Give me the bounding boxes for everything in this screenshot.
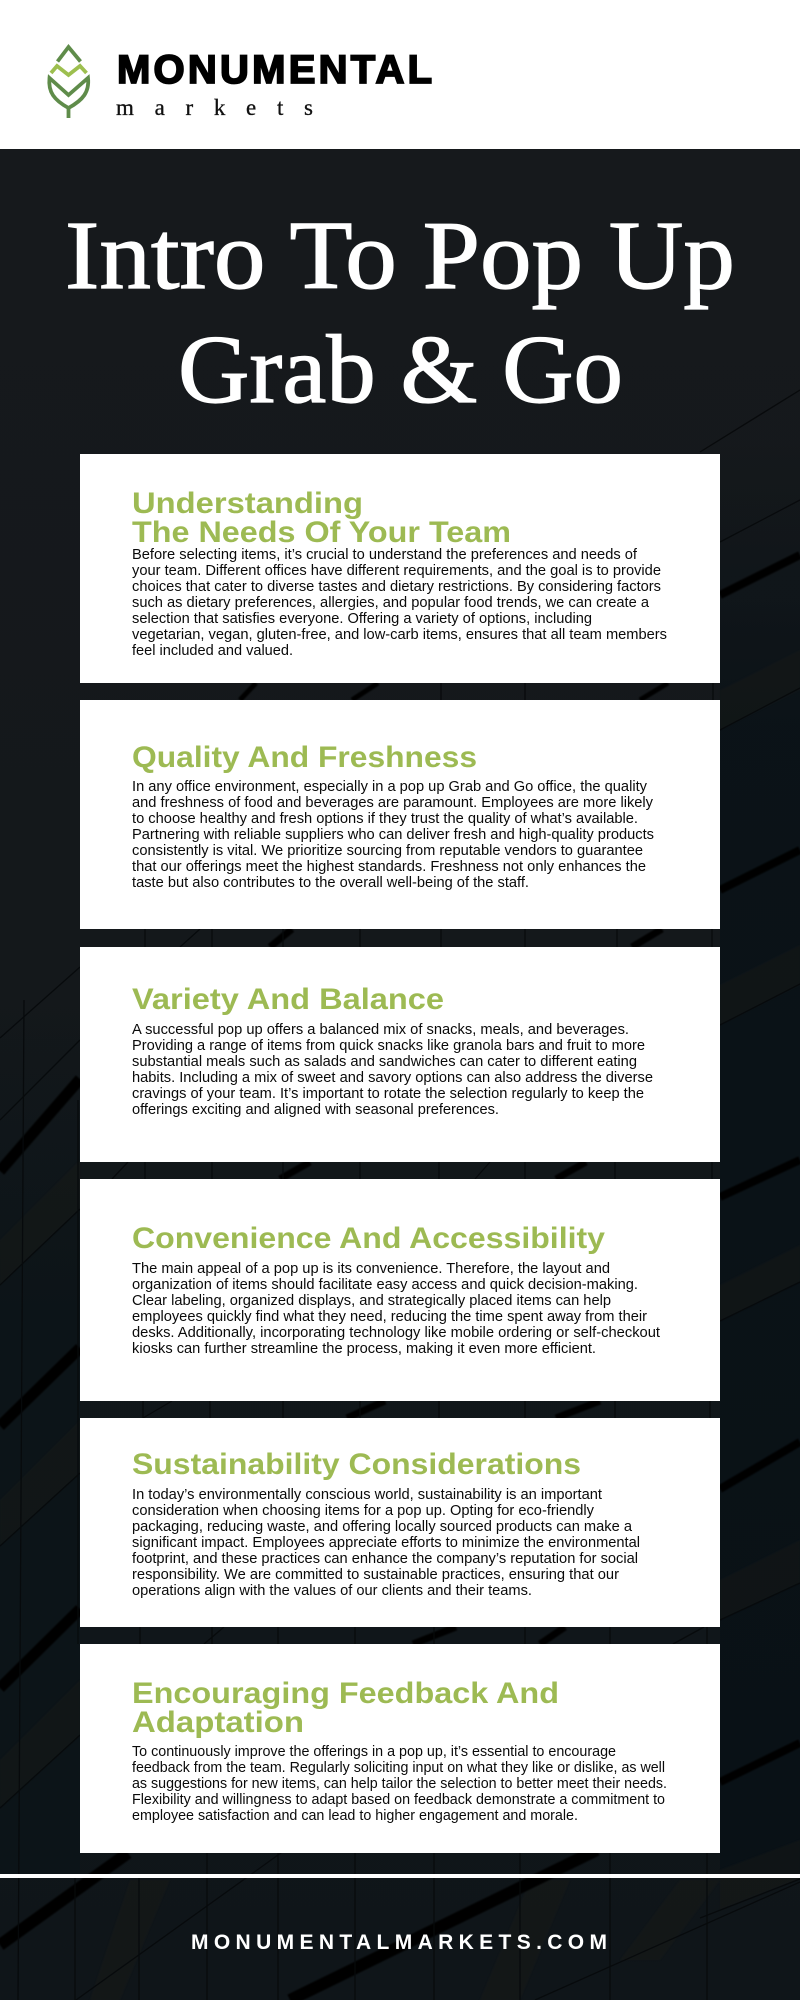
body text: and freshness of food and beverages are paramount. Employees are more likely xyxy=(132,795,654,811)
title: Intro To Pop Up xyxy=(65,202,735,310)
body text: In any office environment, especially in a pop up Grab and Go office, the quality xyxy=(132,779,648,795)
body text: A successful pop up offers a balanced mix of snacks, meals, and beverages. xyxy=(132,1022,629,1038)
title: Grab & Go xyxy=(178,316,623,424)
body text: to choose healthy and fresh options if they trust the quality of what’s available. xyxy=(132,811,638,827)
body text xyxy=(132,1022,653,1118)
body text: Providing a range of items from quick snacks like granola bars and fruit to more xyxy=(132,1038,645,1054)
body text: substantial meals such as salads and sandwiches can cater to different eating xyxy=(132,1054,637,1070)
body text: taste but also contributes to the overall well-being of the staff. xyxy=(132,875,529,891)
body text: as suggestions for new items, can help tailor the selection to better meet their needs. xyxy=(132,1776,667,1792)
body text: that our offerings meet the highest standards. Freshness not only enhances the xyxy=(132,859,646,875)
panel: variety and balance xyxy=(80,947,720,1162)
body text: To continuously improve the offerings in a pop up, it’s essential to encourage xyxy=(132,1744,616,1760)
panel: quality and freshness xyxy=(80,700,720,929)
body text: The main appeal of a pop up is its convenience. Therefore, the layout and xyxy=(132,1261,610,1277)
body text: organization of items should facilitate easy access and quick decision-making. xyxy=(132,1277,638,1293)
heading: Convenience And Accessibility xyxy=(132,1222,605,1255)
body text: feedback from the team. Regularly soliciting input on what they like or dislike, as well xyxy=(132,1760,665,1776)
heading: Quality And Freshness xyxy=(132,741,477,774)
body text: vegetarian, vegan, gluten-free, and low-carb items, ensures that all team members xyxy=(132,627,667,643)
body text: offerings exciting and aligned with seasonal preferences. xyxy=(132,1102,499,1118)
panel: understanding the needs of your team xyxy=(80,454,720,683)
body text: employee satisfaction and can lead to higher engagement and morale. xyxy=(132,1808,578,1824)
heading xyxy=(132,487,511,549)
body text: packaging, reducing waste, and offering locally sourced products can make a xyxy=(132,1519,633,1535)
body text: operations align with the values of our clients and their teams. xyxy=(132,1583,532,1599)
panel: sustainability considerations xyxy=(80,1418,720,1627)
body text: footprint, and these practices can enhance the company’s reputation for social xyxy=(132,1551,638,1567)
heading: Encouraging Feedback And xyxy=(132,1677,559,1710)
heading xyxy=(132,1677,559,1739)
body text: responsibility. We are committed to sustainable practices, ensuring that our xyxy=(132,1567,619,1583)
heading: Adaptation xyxy=(132,1706,304,1739)
body text xyxy=(132,1744,667,1824)
logo subtitle: markets xyxy=(116,95,313,120)
body text: cravings of your team. It’s important to rotate the selection regularly to keep the xyxy=(132,1086,644,1102)
body text: Flexibility and willingness to adapt based on feedback demonstrate a commitment to xyxy=(132,1792,665,1808)
body text: desks. Additionally, incorporating technology like mobile ordering or self-checkout xyxy=(132,1325,661,1341)
body text: employees quickly find what they need, reducing the time spent away from their xyxy=(132,1309,647,1325)
body text: choices that cater to diverse tastes and dietary restrictions. By considering factors xyxy=(132,579,661,595)
logo wordmark: MONUMENTAL xyxy=(117,48,432,92)
heading: The Needs Of Your Team xyxy=(132,516,511,549)
body text xyxy=(132,547,667,659)
body text: such as dietary preferences, allergies, and popular food trends, we can create a xyxy=(132,595,650,611)
footer divider xyxy=(0,1874,800,1878)
body text: Before selecting items, it’s crucial to understand the preferences and needs of xyxy=(132,547,638,563)
body text: kiosks can further streamline the process, making it even more efficient. xyxy=(132,1341,596,1357)
body text: significant impact. Employees appreciate efforts to minimize the environmental xyxy=(132,1535,640,1551)
panel: encouraging feedback and adaptation xyxy=(80,1644,720,1853)
body text xyxy=(132,1487,640,1599)
body text: consideration when choosing items for a pop up. Opting for eco-friendly xyxy=(132,1503,595,1519)
body text: Partnering with reliable suppliers who can deliver fresh and high-quality products xyxy=(132,827,654,843)
panel: convenience and accessibility xyxy=(80,1179,720,1401)
heading: Variety And Balance xyxy=(132,983,444,1016)
body text: Clear labeling, organized displays, and strategically placed items can help xyxy=(132,1293,611,1309)
body text: In today’s environmentally conscious world, sustainability is an important xyxy=(132,1487,603,1503)
heading: Understanding xyxy=(132,487,363,520)
header band xyxy=(0,0,800,149)
body text xyxy=(132,779,654,891)
icon: leaf logo xyxy=(49,47,88,118)
body text: feel included and valued. xyxy=(132,643,293,659)
title xyxy=(65,202,735,424)
body text: consistently is vital. We prioritize sourcing from reputable vendors to guarantee xyxy=(132,843,643,859)
body text xyxy=(132,1261,661,1357)
body text: habits. Including a mix of sweet and savory options can also address the diverse xyxy=(132,1070,653,1086)
body text: selection that satisfies everyone. Offering a variety of options, including xyxy=(132,611,592,627)
heading: Sustainability Considerations xyxy=(132,1448,581,1481)
footer website: MONUMENTALMARKETS.COM xyxy=(191,1931,607,1954)
body text: your team. Different offices have different requirements, and the goal is to provide xyxy=(132,563,661,579)
